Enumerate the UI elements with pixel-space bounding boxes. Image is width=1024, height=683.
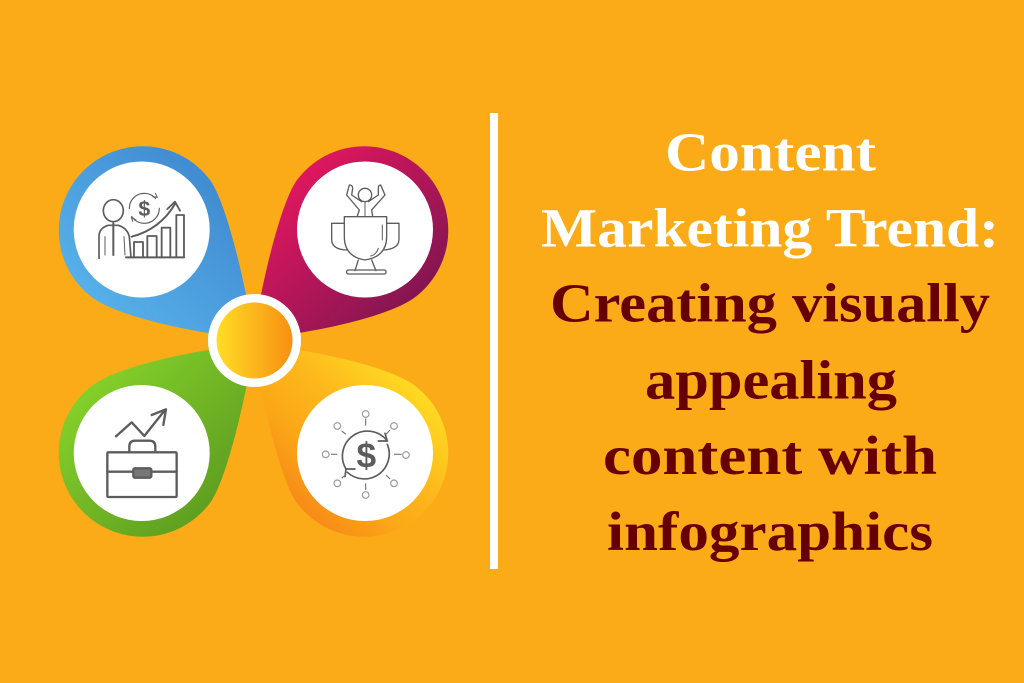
green petal shape: [59, 349, 248, 537]
dollar sign: $: [357, 436, 377, 475]
hub gradient disc: [216, 302, 292, 378]
icon: person rising from trophy: [332, 185, 399, 274]
icon: businessman with rising bar chart: [99, 193, 184, 258]
icon: briefcase with rising arrow: [107, 409, 177, 497]
blue petal white disc: [74, 162, 210, 298]
icon: dollar with network nodes: [322, 411, 409, 498]
orange petal shape: [259, 349, 448, 537]
green petal white disc: [74, 385, 210, 521]
title text: [541, 122, 999, 562]
petal: orange: [259, 349, 448, 537]
dollar sign: $: [138, 197, 150, 221]
petal: green: [59, 349, 248, 537]
centre hub: [208, 294, 301, 387]
heading: Content Marketing Trend: Content: [665, 122, 877, 182]
crimson petal shape: [259, 146, 448, 334]
vertical divider: [490, 113, 498, 569]
petal: blue: [59, 146, 248, 334]
heading: Content Marketing Trend: Marketing Trend:: [541, 198, 999, 258]
petal: crimson: [259, 146, 448, 334]
blue petal shape: [59, 146, 248, 334]
subheading: Creating visually appealing content with infographics: content with: [603, 425, 937, 486]
subheading: Creating visually appealing content with infographics: appealing: [645, 350, 897, 410]
orange petal white disc: [297, 385, 433, 521]
subheading: Creating visually appealing content with infographics: Creating visually: [550, 272, 990, 334]
crimson petal white disc: [297, 162, 433, 298]
subheading: Creating visually appealing content with infographics: [550, 272, 990, 562]
heading: Content Marketing Trend: [541, 122, 999, 258]
hub white ring: [208, 294, 301, 387]
subheading: Creating visually appealing content with infographics: infographics: [607, 501, 933, 562]
